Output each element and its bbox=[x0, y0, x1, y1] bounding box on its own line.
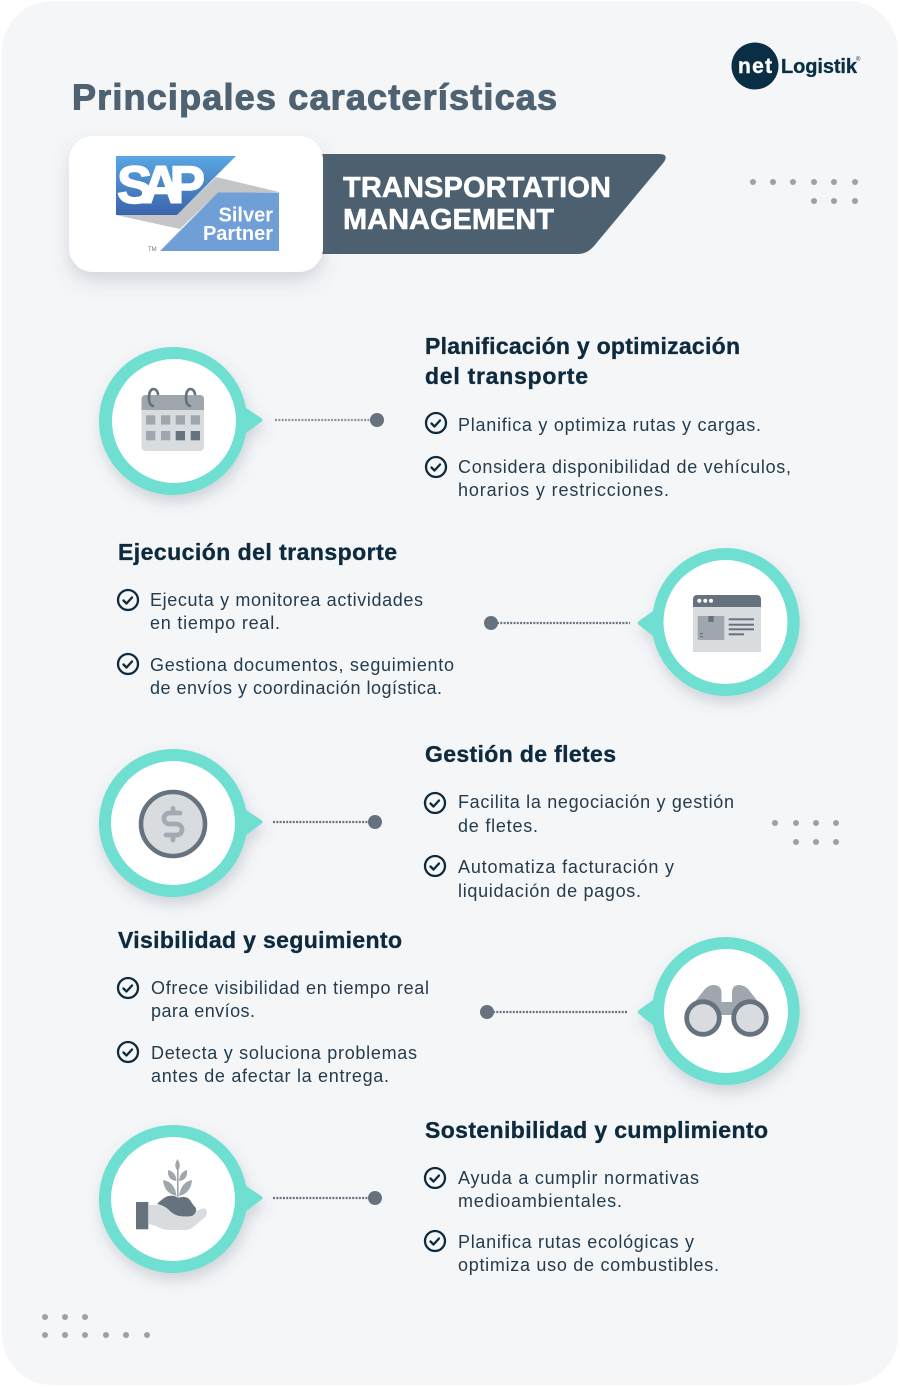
badge: browser package bbox=[638, 548, 800, 696]
item: Ofrece visibilidad en tiempo real bbox=[151, 978, 429, 998]
badge: plant in hand bbox=[99, 1125, 263, 1273]
section: visibilidad bbox=[118, 927, 800, 1086]
logo: netLogistik: Logistik bbox=[781, 56, 858, 78]
connector bbox=[275, 413, 384, 427]
item bbox=[425, 1231, 719, 1275]
item bbox=[425, 1168, 699, 1211]
connector bbox=[480, 1005, 627, 1019]
item: Automatiza facturación y bbox=[458, 857, 674, 877]
item: Ejecuta y monitorea actividades bbox=[150, 590, 423, 610]
heading bbox=[425, 333, 740, 389]
item: Considera disponibilidad de vehículos, bbox=[458, 457, 791, 477]
section: fletes bbox=[99, 741, 734, 901]
heading: Planificación y optimización bbox=[425, 333, 740, 359]
banner: transportation management bbox=[320, 154, 666, 254]
title: Principales características bbox=[72, 76, 557, 118]
item: Detecta y soluciona problemas bbox=[151, 1043, 417, 1063]
section: sostenibilidad bbox=[99, 1117, 768, 1275]
item: Planifica rutas ecológicas y bbox=[458, 1232, 694, 1252]
connector bbox=[484, 616, 630, 630]
decorative dots: bottom left bbox=[42, 1314, 150, 1338]
heading: del transporte bbox=[425, 363, 588, 389]
item bbox=[118, 978, 429, 1021]
logo: netLogistik: net bbox=[738, 55, 772, 78]
card: SAP Silver Partner logo: SAP bbox=[117, 156, 205, 215]
connector bbox=[273, 815, 382, 829]
item bbox=[425, 856, 674, 901]
item: de fletes. bbox=[458, 816, 538, 836]
item: en tiempo real. bbox=[150, 613, 280, 633]
item: Gestiona documentos, seguimiento bbox=[150, 655, 454, 675]
card: SAP Silver Partner logo: Silver bbox=[219, 204, 273, 226]
card: SAP Silver Partner logo bbox=[69, 136, 323, 272]
section: ejecución bbox=[118, 539, 800, 698]
heading: Sostenibilidad y cumplimiento bbox=[425, 1117, 768, 1143]
heading: Gestión de fletes bbox=[425, 741, 616, 767]
badge: binoculars bbox=[638, 937, 800, 1085]
badge: dollar coin bbox=[99, 749, 262, 897]
banner: transportation management: TRANSPORTATION bbox=[343, 172, 611, 204]
item: Facilita la negociación y gestión bbox=[458, 792, 734, 812]
item bbox=[118, 590, 423, 633]
card: SAP Silver Partner logo: TM bbox=[148, 247, 157, 253]
item: optimiza uso de combustibles. bbox=[458, 1255, 719, 1275]
heading: Ejecución del transporte bbox=[118, 539, 397, 565]
item bbox=[118, 1042, 417, 1086]
item: antes de afectar la entrega. bbox=[151, 1066, 389, 1086]
item: medioambientales. bbox=[458, 1191, 622, 1211]
item: para envíos. bbox=[151, 1001, 255, 1021]
item bbox=[118, 654, 454, 698]
item: Planifica y optimiza rutas y cargas. bbox=[458, 415, 761, 435]
heading: Visibilidad y seguimiento bbox=[118, 927, 402, 953]
item: horarios y restricciones. bbox=[458, 480, 669, 500]
item: Ayuda a cumplir normativas bbox=[458, 1168, 699, 1188]
logo: netLogistik: ® bbox=[856, 56, 861, 63]
item: de envíos y coordinación logística. bbox=[150, 678, 442, 698]
item bbox=[425, 792, 734, 836]
decorative dots: top right bbox=[750, 179, 858, 204]
decorative dots: middle right bbox=[772, 820, 839, 845]
badge: calendar bbox=[99, 347, 262, 495]
banner: transportation management: MANAGEMENT bbox=[343, 204, 554, 236]
connector bbox=[273, 1191, 382, 1205]
card: SAP Silver Partner logo: Partner bbox=[203, 223, 273, 245]
item bbox=[426, 457, 791, 500]
logo: netLogistik bbox=[732, 42, 861, 90]
item: liquidación de pagos. bbox=[458, 881, 641, 901]
section: planificación bbox=[99, 333, 791, 500]
